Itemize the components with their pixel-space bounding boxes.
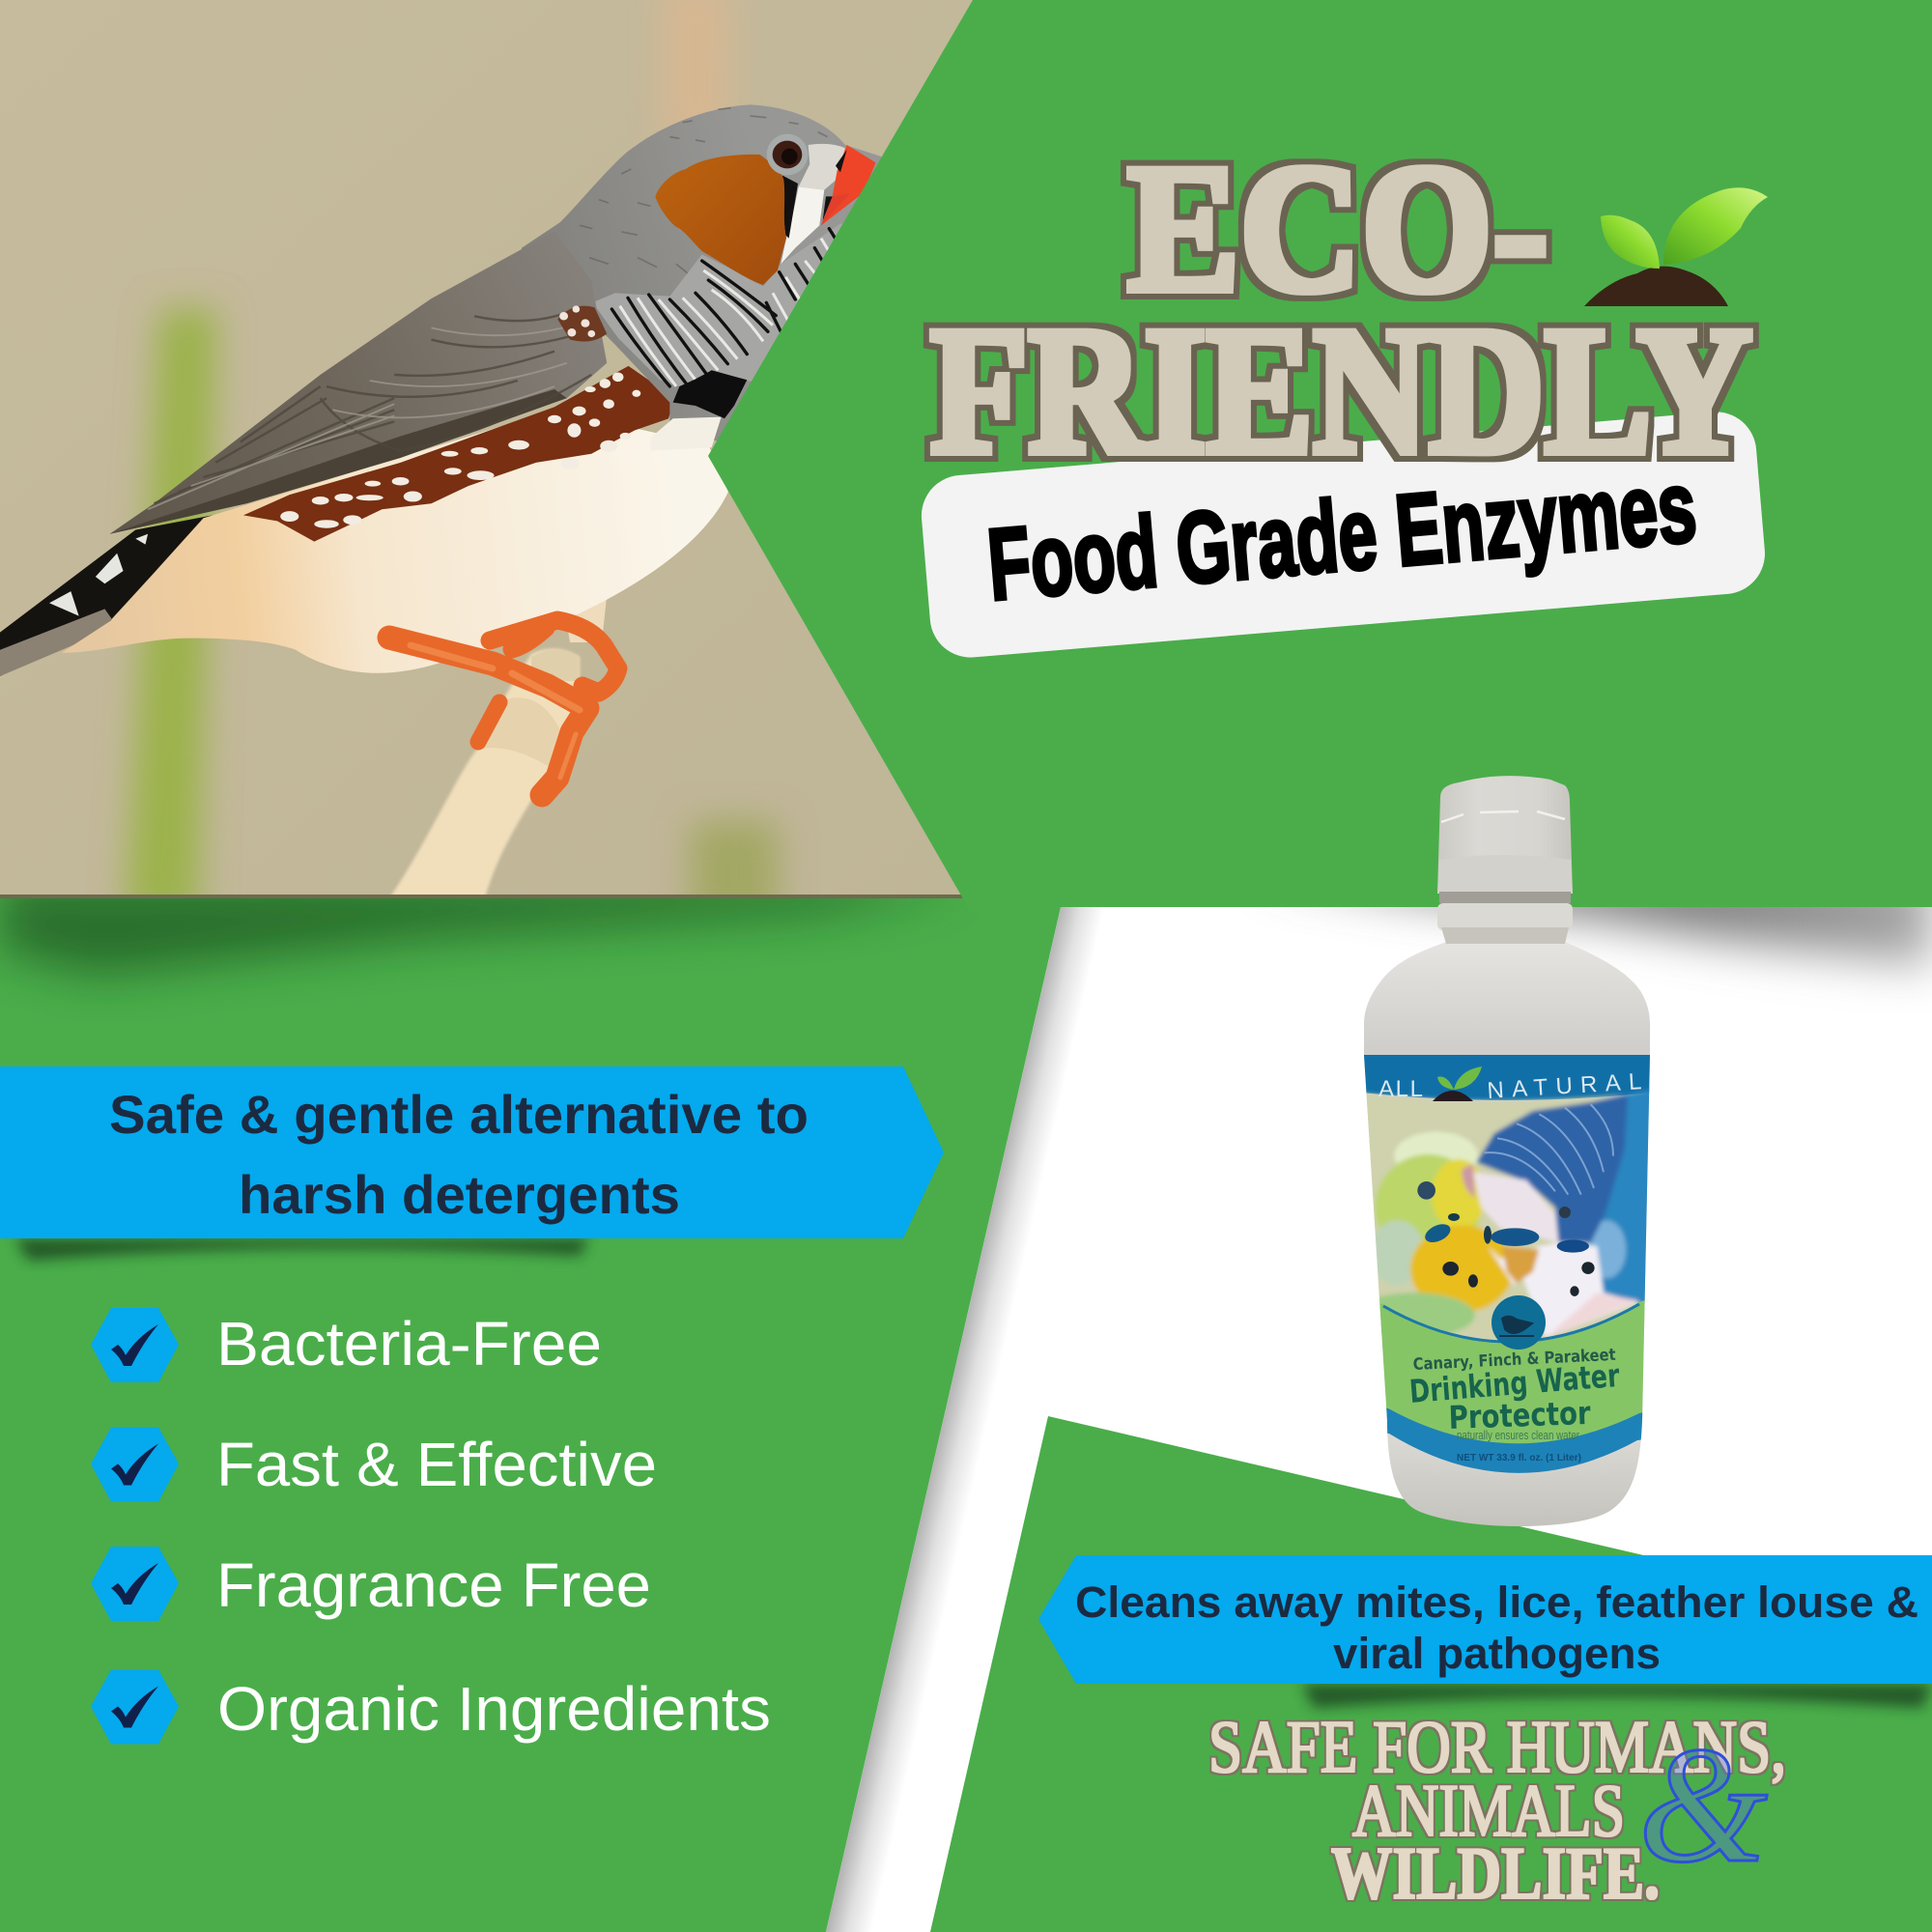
label artwork — [1352, 1055, 1662, 1473]
right banner shadow — [1302, 1684, 1932, 1708]
black breast patch — [673, 370, 747, 418]
right blue banner: viral pathogens — [1333, 1629, 1661, 1678]
safe for humans, animals and wildlife wordmark — [1208, 1705, 1786, 1915]
body — [62, 410, 728, 673]
parakeet markings — [1417, 1181, 1435, 1200]
yellow parakeet — [1394, 1132, 1478, 1180]
checklist: Bacteria-Free — [216, 1309, 602, 1378]
tail — [0, 515, 213, 676]
label picture ground — [1359, 1092, 1655, 1342]
photo base line — [0, 895, 966, 898]
script ampersand: & — [1638, 1714, 1768, 1897]
green band — [1352, 1294, 1662, 1443]
bottle cap — [1437, 776, 1573, 944]
shoulder patch — [557, 306, 607, 342]
tilted white pill — [919, 409, 1768, 661]
neck and crown — [522, 104, 895, 451]
wing feathers — [154, 310, 591, 503]
bottle body — [1364, 942, 1650, 1526]
blue parakeet chest — [1488, 1243, 1639, 1338]
cheek patch — [655, 155, 786, 285]
label leaf — [1437, 1066, 1482, 1090]
label bird badge — [1492, 1295, 1546, 1350]
zebra throat — [595, 224, 842, 386]
beak — [821, 145, 876, 225]
label text: product name — [1408, 1346, 1622, 1463]
safe for humans, animals and wildlife wordmark: WILDLIFE. — [1331, 1832, 1660, 1915]
beak — [1502, 1246, 1539, 1283]
label text: product name: naturally ensures clean water — [1457, 1428, 1580, 1442]
title: Eco-Friendly — [919, 128, 1768, 661]
cap stripes — [1485, 1104, 1613, 1195]
safe for humans, animals and wildlife wordmark: SAFE FOR HUMANS, — [1208, 1705, 1786, 1788]
photo: zebra finch on a perch — [0, 0, 976, 927]
left banner shadow — [14, 1238, 589, 1261]
left blue banner — [0, 1066, 944, 1238]
crown speckles — [580, 108, 828, 277]
blue parakeet cap — [1476, 1094, 1628, 1243]
green diagonal over photo — [708, 0, 1932, 913]
heading line two: FRIENDLY — [930, 290, 1752, 493]
item: Organic Ingredients — [91, 1669, 179, 1745]
checklist — [91, 1308, 771, 1745]
label text: product name: Drinking Water — [1408, 1356, 1622, 1410]
label text: product name: Protector — [1448, 1394, 1592, 1436]
blue parakeet face — [1473, 1172, 1558, 1243]
shadow under photo — [0, 884, 966, 976]
banner text: Cleans away mites, lice, feather louse & — [1075, 1577, 1918, 1627]
item: Bacteria-Free — [91, 1308, 179, 1382]
item: Fast and Effective — [91, 1428, 179, 1501]
label text: all natural — [1378, 1068, 1642, 1104]
flank spots — [280, 372, 640, 528]
product bottle — [1352, 776, 1662, 1526]
wing — [110, 231, 607, 534]
safe for humans, animals and wildlife wordmark: ANIMALS — [1352, 1769, 1625, 1852]
flank — [243, 366, 674, 542]
white panel — [826, 869, 1932, 1932]
white face fluff — [799, 144, 845, 190]
heading line one: ECO- — [1127, 128, 1548, 330]
label text: all natural: NATURAL — [1487, 1068, 1642, 1104]
finch head and throat — [522, 104, 895, 451]
checklist: Organic Ingredients — [217, 1674, 771, 1744]
icon: sprout — [1584, 187, 1768, 306]
back foot — [490, 620, 618, 693]
checklist: Fast & Effective — [216, 1430, 657, 1499]
perch — [568, 600, 607, 642]
eye — [767, 134, 808, 175]
lower right green panel — [930, 1416, 1932, 1932]
black face stripe — [782, 176, 798, 239]
blue bottom band — [1372, 1406, 1662, 1473]
label text: all natural: ALL — [1378, 1076, 1423, 1102]
blue top band — [1352, 1055, 1662, 1100]
label text: product name: Canary, Finch & Parakeet — [1412, 1346, 1616, 1375]
checklist: Fragrance Free — [216, 1550, 651, 1620]
white face stripe — [781, 186, 824, 264]
right blue banner — [1038, 1555, 1932, 1684]
left blue banner: harsh detergents — [239, 1164, 680, 1225]
item: Fragrance Free — [91, 1547, 179, 1621]
banner text: Safe & gentle alternative to — [109, 1084, 809, 1145]
front leg and toes — [389, 638, 587, 795]
label text: product name: NET WT 33.9 fl. oz. (1 Liter) — [1457, 1453, 1581, 1463]
